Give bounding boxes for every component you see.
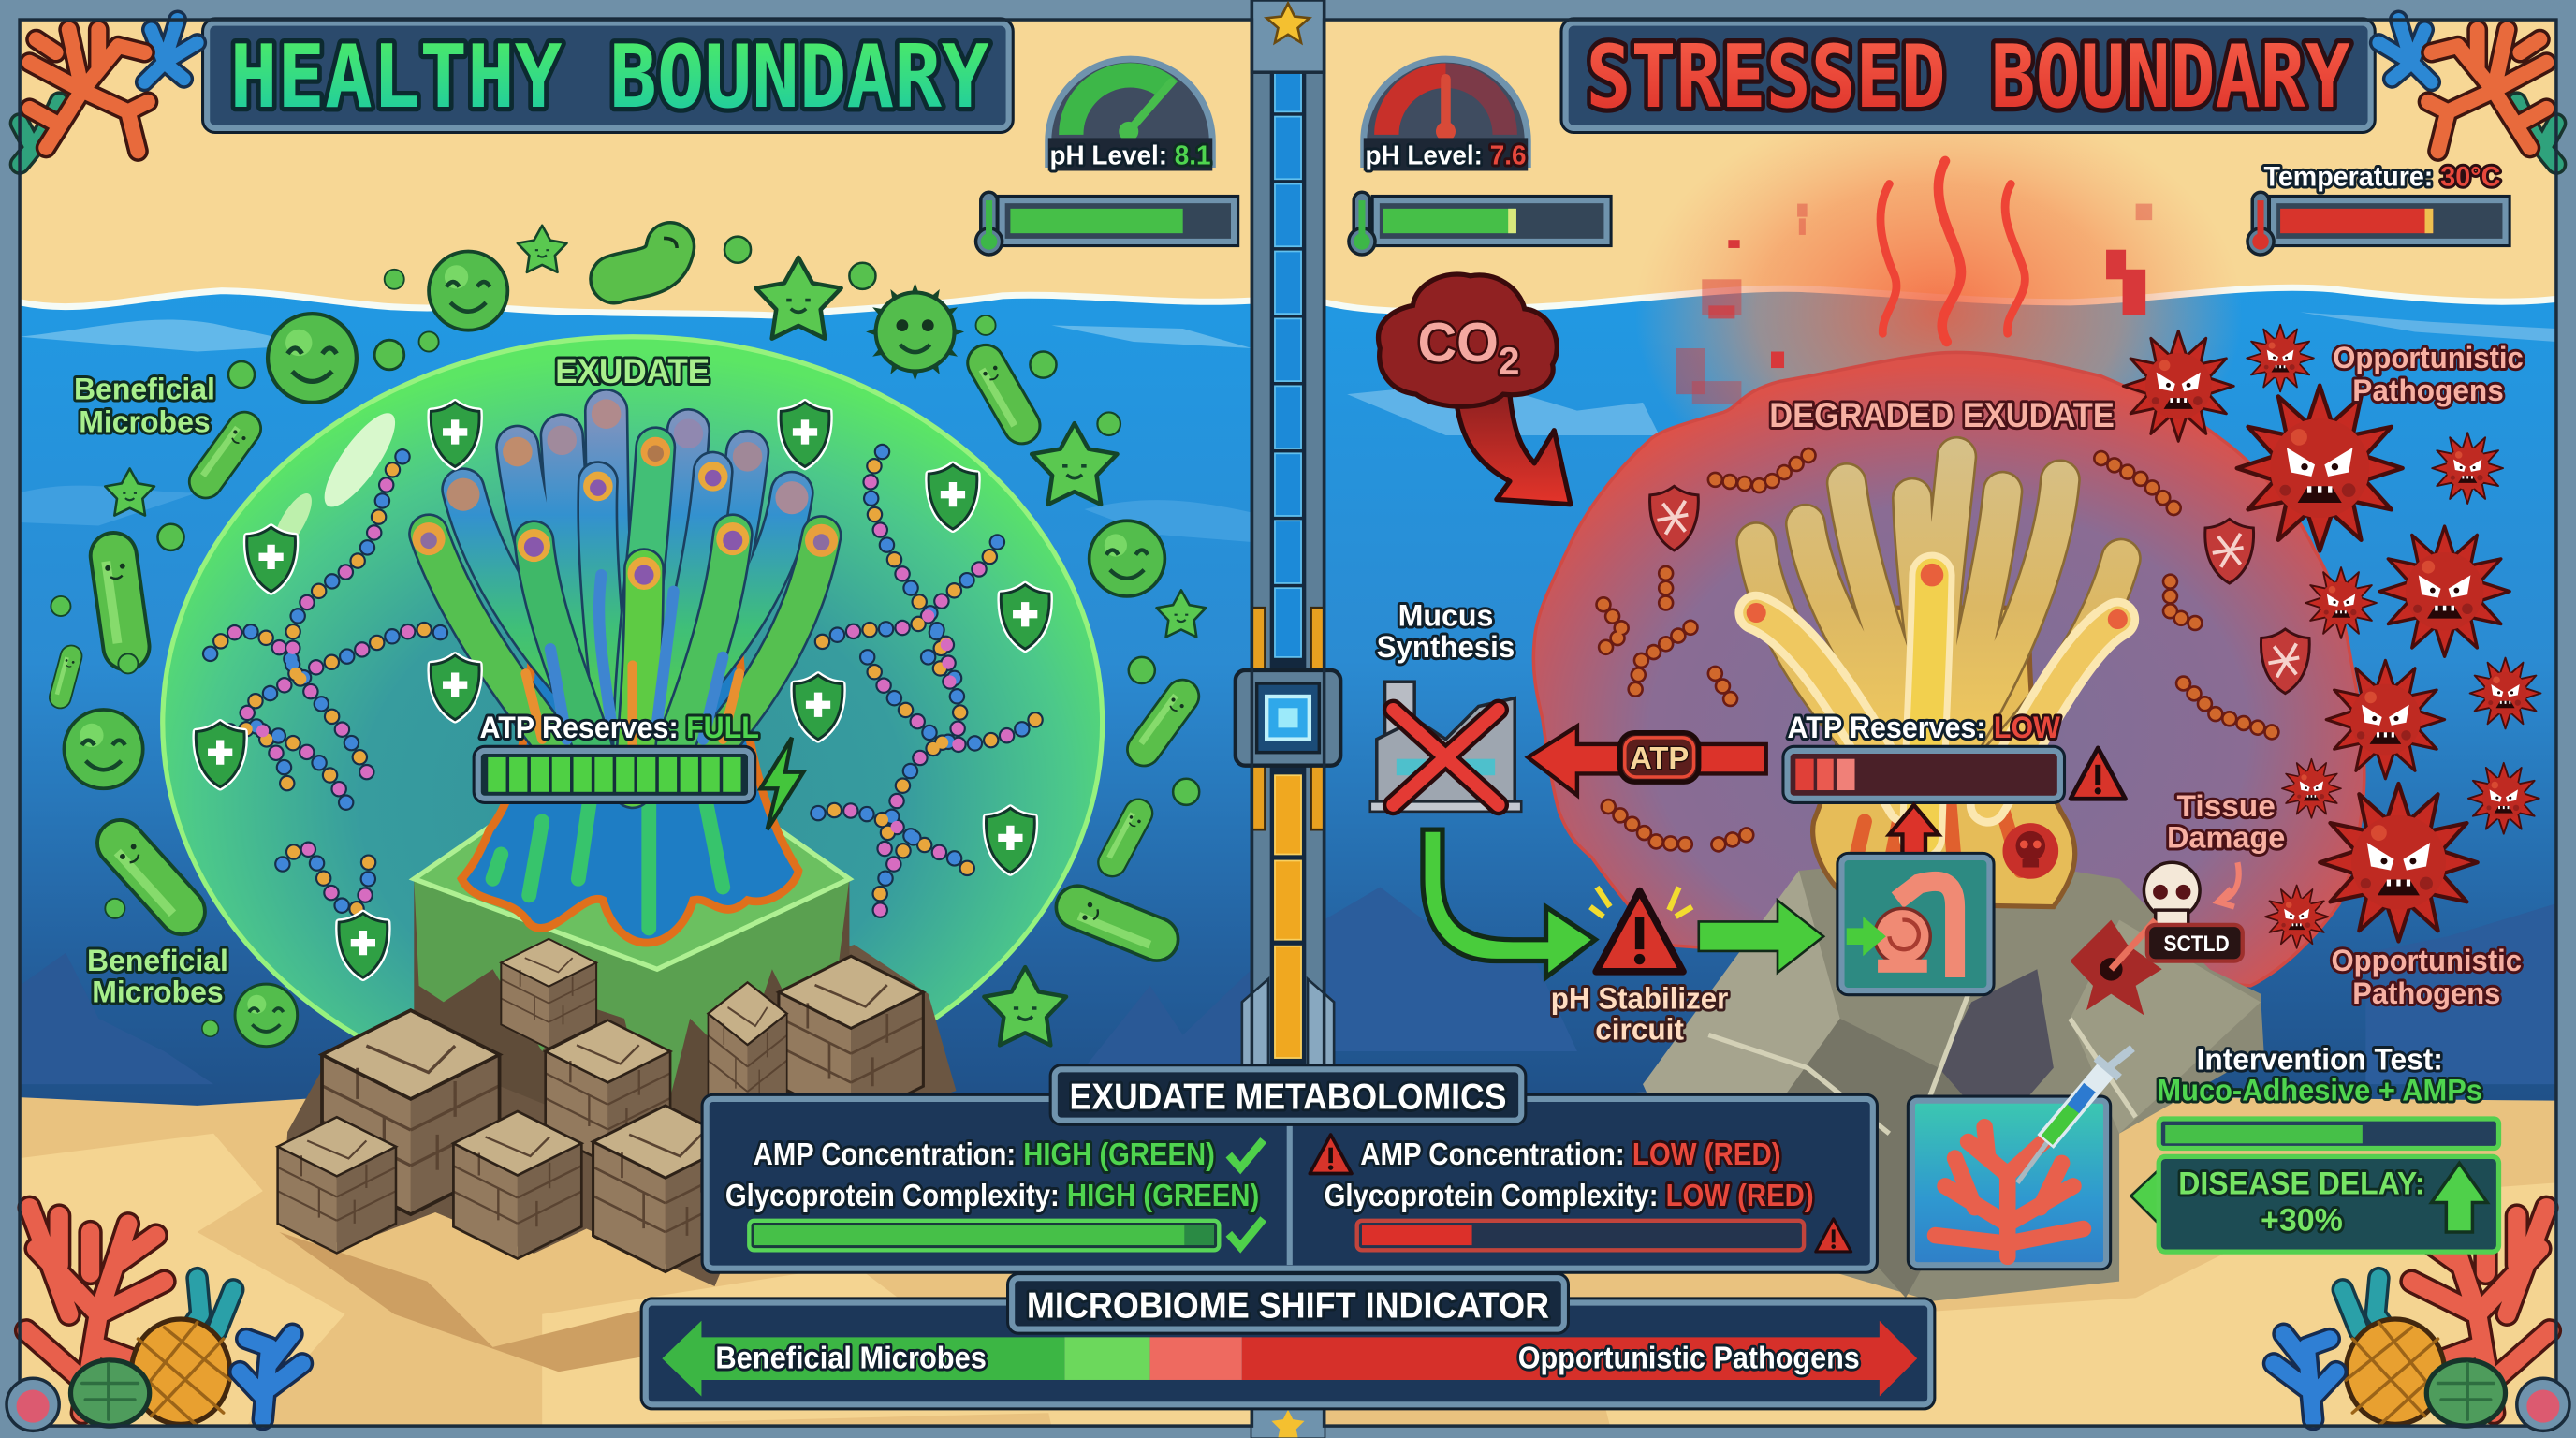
panel: microbiome shift indicator bbox=[646, 1278, 1930, 1404]
CO2 cloud with arrow: CO bbox=[1418, 311, 1501, 374]
coral top left bbox=[20, 20, 198, 164]
label: opportunistic pathogens upper: Pathogens bbox=[2352, 374, 2504, 407]
label: mucus synthesis: Mucus bbox=[1398, 599, 1493, 633]
icon: pump box bbox=[1841, 858, 1989, 990]
label: beneficial microbes lower: Microbes bbox=[92, 975, 224, 1008]
label: opportunistic pathogens lower: Pathogens bbox=[2352, 976, 2500, 1010]
panel: intervention illustration coral with syringe bbox=[1912, 1049, 2132, 1265]
label: mucus synthesis: Synthesis bbox=[1377, 630, 1515, 664]
green arrow to pump bbox=[1699, 901, 1823, 973]
label: exudate: EXUDATE bbox=[555, 352, 710, 390]
label: beneficial microbes lower bbox=[87, 944, 228, 1008]
heat waves bbox=[1881, 161, 2025, 342]
rock pedestal with stone blocks bbox=[278, 814, 956, 1286]
intervention progress bar bbox=[2159, 1119, 2499, 1149]
broken shields bbox=[1650, 486, 2309, 694]
heading: microbiome shift indicator: MICROBIOME SHIFT INDICATOR bbox=[1027, 1285, 1549, 1326]
label: beneficial microbes lower: Beneficial bbox=[87, 944, 228, 977]
icon: skull bbox=[2144, 862, 2200, 925]
icon: factory crossed out bbox=[1370, 682, 1521, 812]
label: mucus synthesis bbox=[1377, 599, 1515, 664]
label: tissue damage: Tissue bbox=[2177, 789, 2276, 823]
healthy metabolite readout: AMP Concentration: HIGH (GREEN) bbox=[754, 1137, 1215, 1172]
coral bottom right bbox=[2274, 1208, 2550, 1426]
label: beneficial microbes upper bbox=[74, 372, 215, 438]
stressed metabolite readout bbox=[1310, 1135, 1852, 1252]
panel: exudate metabolomics bbox=[707, 1069, 1873, 1269]
coral bottom left bbox=[26, 1208, 302, 1426]
label: opportunistic pathogens lower: Opportunistic bbox=[2331, 944, 2522, 977]
icon: center gem bbox=[1236, 670, 1340, 766]
heading: exudate metabolomics: EXUDATE METABOLOMICS bbox=[1070, 1077, 1506, 1117]
label: pH stabilizer circuit bbox=[1551, 981, 1729, 1047]
label: tissue damage: Damage bbox=[2167, 820, 2285, 854]
gauge: pH level 8.1: pH Level: 8.1 bbox=[1050, 140, 1211, 170]
ATP reserves full meter bbox=[478, 711, 803, 829]
label: opportunistic pathogens lower bbox=[2331, 944, 2522, 1010]
beneficial microbes bbox=[51, 226, 1206, 1047]
label: intervention test: Intervention Test: bbox=[2197, 1042, 2443, 1076]
lesion on rock bbox=[2070, 920, 2162, 1015]
label: degraded exudate: DEGRADED EXUDATE bbox=[1769, 396, 2115, 434]
label: beneficial microbes upper: Microbes bbox=[79, 404, 211, 438]
thermometer bar pH bbox=[1349, 192, 1606, 255]
center divider pillar bbox=[1236, 0, 1340, 1437]
callout: disease delay: +30% bbox=[2261, 1202, 2343, 1238]
stressed metabolite readout: AMP Concentration: LOW (RED) bbox=[1360, 1137, 1781, 1172]
molecular chains: AMPs and glycoproteins bbox=[211, 452, 1040, 920]
rock base degraded bbox=[1643, 854, 2264, 1301]
icon: lightning bolt bbox=[761, 738, 803, 829]
healthy metabolite readout: Glycoprotein Complexity: HIGH (GREEN) bbox=[725, 1179, 1259, 1213]
icon: star top bbox=[1266, 4, 1310, 43]
panel: microbiome shift indicator: Beneficial Microbes bbox=[715, 1342, 987, 1376]
gauge: pH level 8.1 bbox=[1048, 59, 1212, 170]
illustration: bleached anemone coral bbox=[1747, 457, 2128, 907]
protective shields bbox=[196, 403, 1049, 977]
CO2 cloud with arrow: 2 bbox=[1499, 339, 1519, 383]
label: SCTLD bbox=[2147, 925, 2243, 961]
icon: red skull spot bbox=[2002, 823, 2058, 879]
label: pH stabilizer circuit: pH Stabilizer bbox=[1551, 981, 1729, 1015]
small arrow to skull bbox=[2217, 862, 2239, 907]
label: SCTLD: SCTLD bbox=[2163, 932, 2230, 957]
green curved arrow to pH stabilizer bbox=[1423, 829, 1595, 977]
thermometer bar temperature: Temperature: 30°C bbox=[2264, 161, 2500, 192]
thermometer bar healthy bbox=[976, 192, 1234, 255]
ATP reserves full meter: ATP Reserves: FULL bbox=[479, 711, 759, 744]
panel: healthy boundary scene bbox=[20, 20, 1251, 1426]
thermometer bar temperature bbox=[2247, 161, 2506, 255]
icon: warning triangle bbox=[2071, 748, 2126, 799]
ATP reserves low meter bbox=[1788, 711, 2126, 799]
gauge: pH level 7.6 bbox=[1364, 59, 1528, 170]
red arrow upward bbox=[1889, 805, 1939, 860]
ATP flow arrow: ATP bbox=[1630, 741, 1689, 776]
ATP flow arrow bbox=[1528, 726, 1766, 795]
label: intervention test: Muco-Adhesive + AMPs bbox=[2157, 1074, 2482, 1108]
callout: disease delay bbox=[2130, 1156, 2499, 1252]
icon: up arrow bbox=[2432, 1163, 2487, 1232]
CO2 cloud with arrow bbox=[1379, 274, 1571, 505]
coral top right bbox=[2378, 20, 2556, 164]
title: stressed boundary: STRESSED BOUNDARY bbox=[1587, 26, 2350, 127]
label: opportunistic pathogens upper bbox=[2333, 341, 2524, 407]
title: healthy boundary: HEALTHY BOUNDARY bbox=[230, 26, 989, 127]
red chain fragments bbox=[1595, 452, 2274, 844]
degrading particles bbox=[1676, 204, 2152, 404]
exudate bubble bbox=[163, 337, 1103, 1108]
heat glow bbox=[1634, 98, 2243, 526]
frame corner ornaments bbox=[7, 1378, 2569, 1431]
label: intervention test bbox=[2157, 1042, 2482, 1108]
degraded exudate boundary bbox=[1533, 352, 2364, 986]
shift bar bbox=[662, 1321, 1917, 1397]
icon: pH stabilizer warning with sparks bbox=[1590, 888, 1692, 972]
panel: stressed boundary scene bbox=[1325, 20, 2556, 1426]
label: tissue damage bbox=[2167, 789, 2285, 854]
label: pH stabilizer circuit: circuit bbox=[1595, 1013, 1684, 1047]
label: beneficial microbes upper: Beneficial bbox=[74, 372, 215, 405]
gauge: pH level 7.6: pH Level: 7.6 bbox=[1365, 140, 1526, 170]
panel: microbiome shift indicator: Opportunistic Pathogens bbox=[1518, 1342, 1860, 1376]
stressed metabolite readout: Glycoprotein Complexity: LOW (RED) bbox=[1325, 1179, 1814, 1213]
opportunistic pathogens bbox=[2123, 325, 2540, 948]
healthy metabolite readout bbox=[725, 1137, 1264, 1250]
callout: disease delay: DISEASE DELAY: bbox=[2178, 1167, 2425, 1202]
label: opportunistic pathogens upper: Opportunistic bbox=[2333, 341, 2524, 374]
illustration: healthy anemone coral bbox=[413, 399, 838, 943]
ATP reserves low meter: ATP Reserves: LOW bbox=[1788, 711, 2060, 744]
